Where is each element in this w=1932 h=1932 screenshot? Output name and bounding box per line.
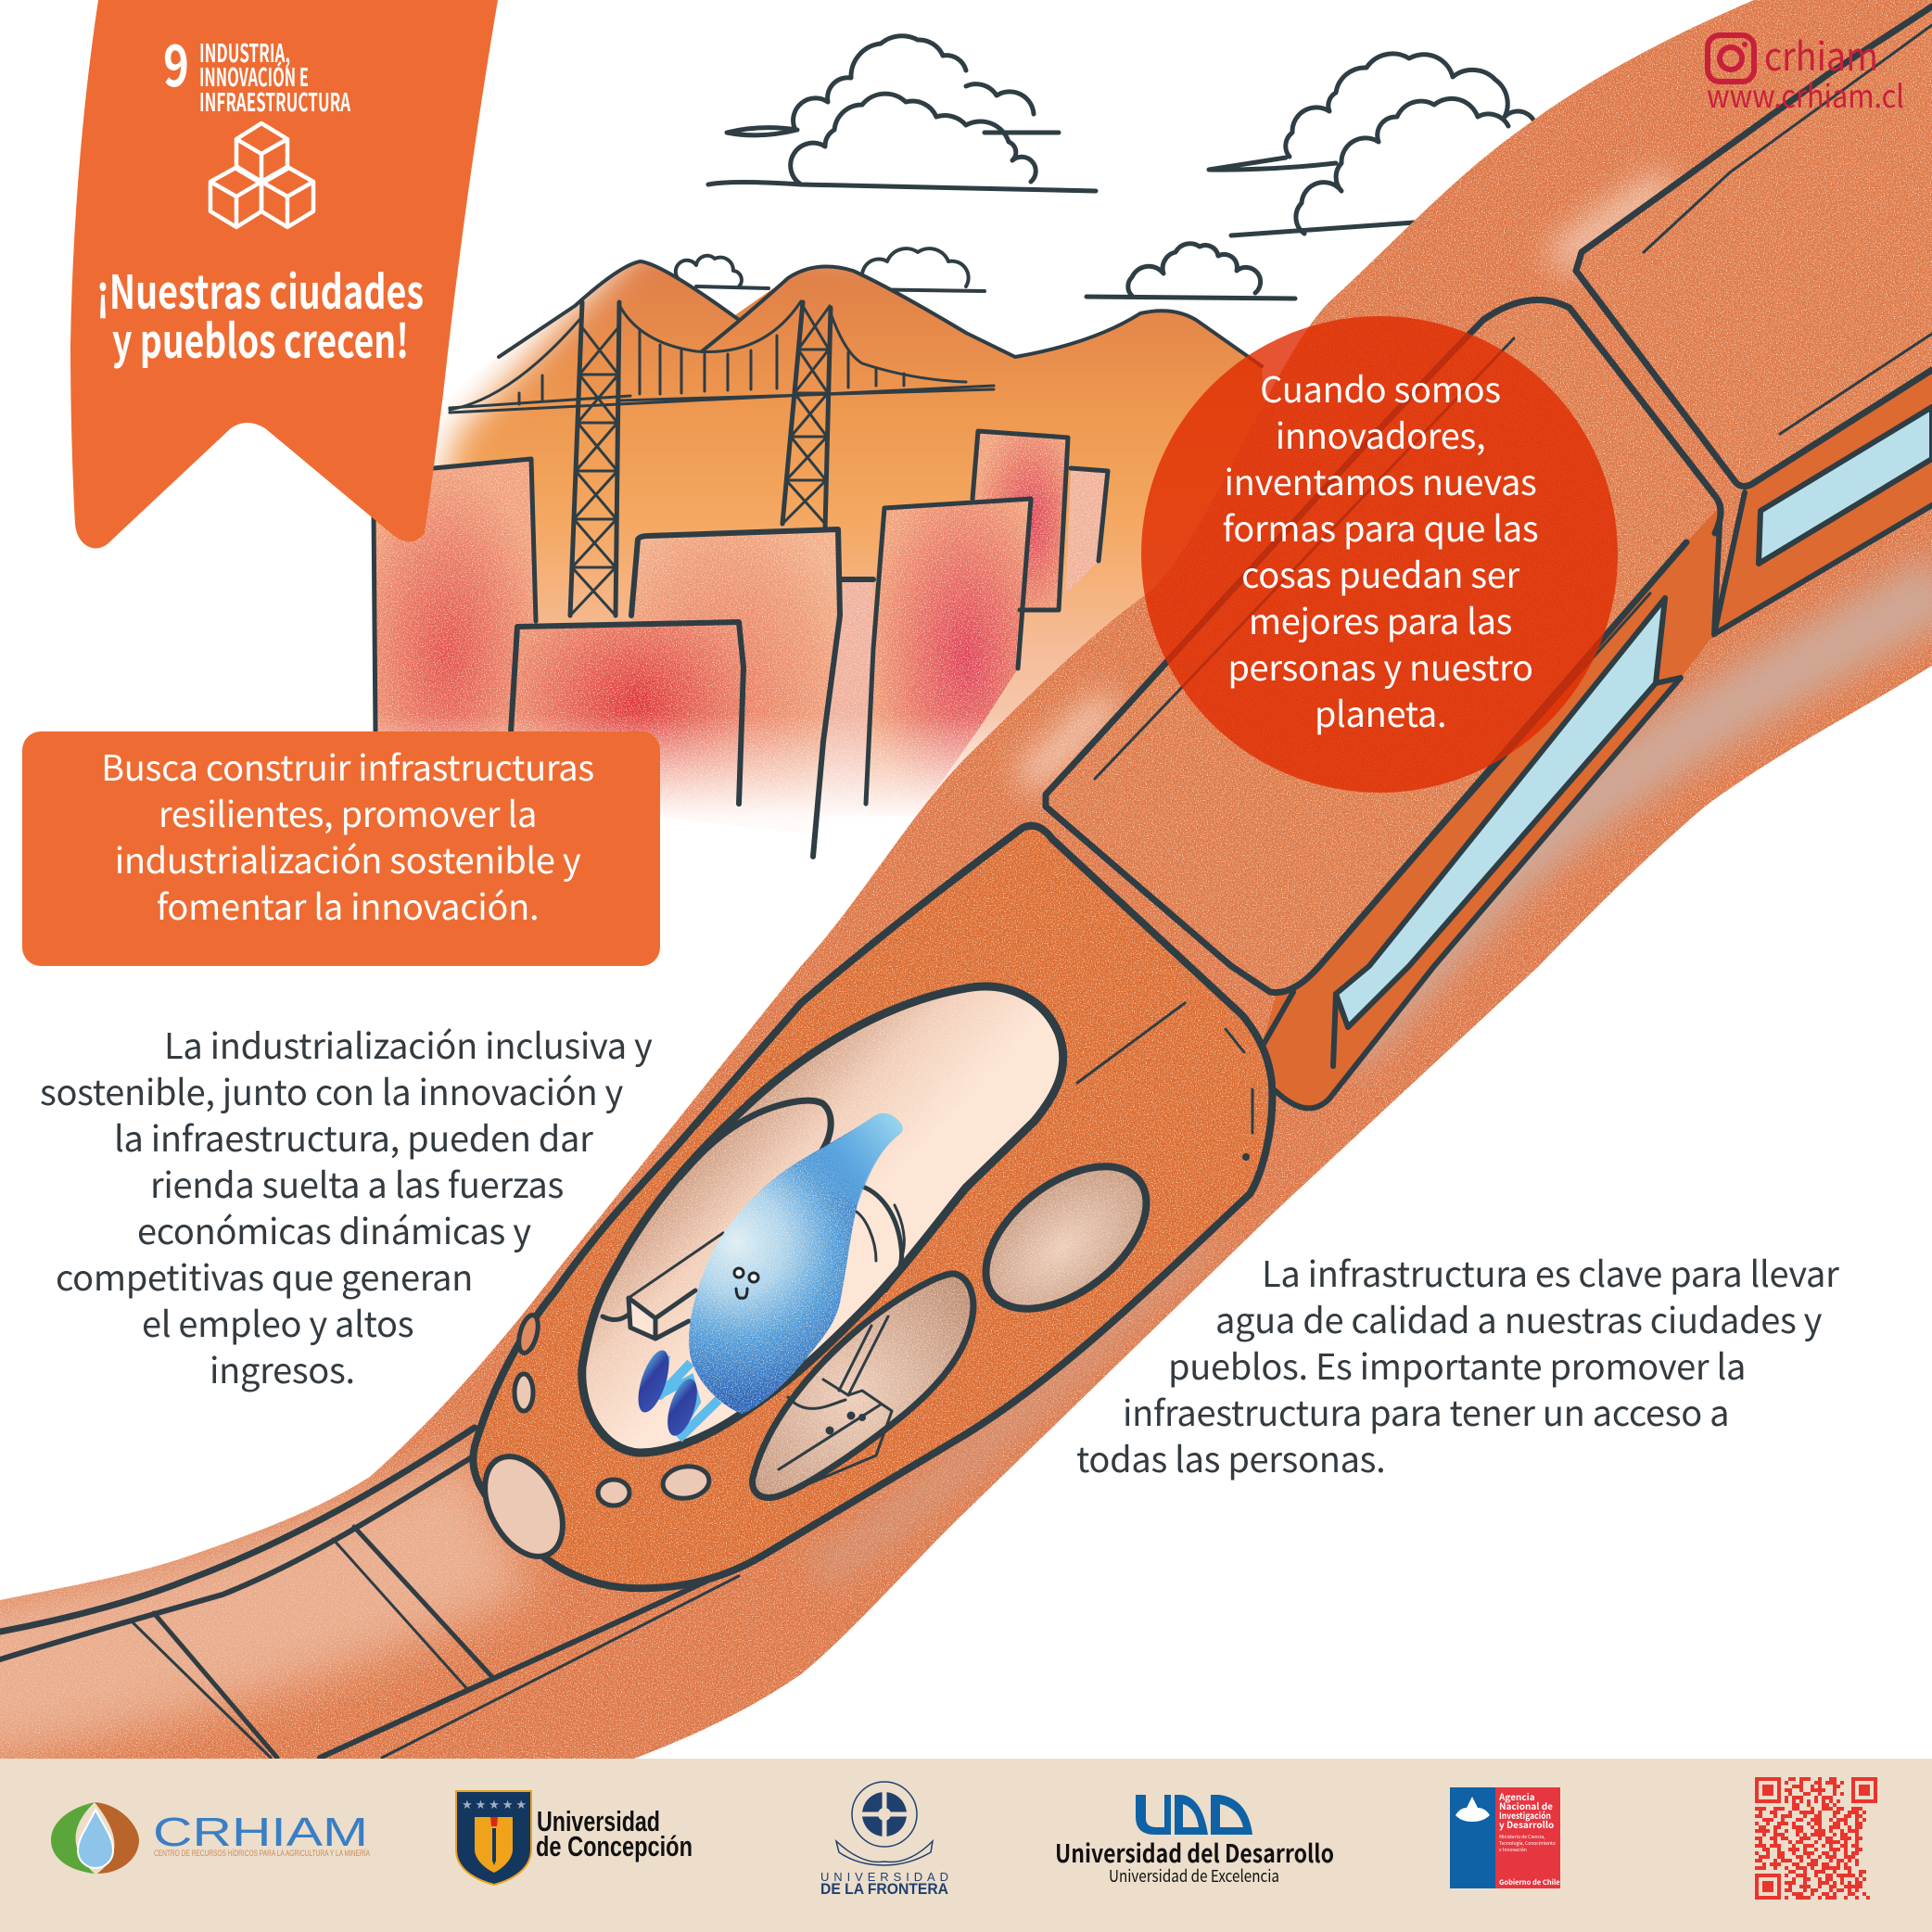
icon: instagram [1708,35,1754,82]
city: mountains and buildings [352,232,1298,857]
banner: SDG 9 [70,0,498,548]
right paragraph: pueblos. Es importante promover la [1168,1339,1746,1390]
side oval window [960,1138,1173,1337]
logo: ANID: Agencia [1498,1789,1535,1803]
logo: Universidad de Concepción: de Concepción [536,1830,693,1862]
building fills [375,431,1108,834]
icon: cubes [210,123,313,227]
nose headlight [469,1443,578,1570]
banner: SDG 9: INFRAESTRUCTURA [199,83,350,119]
logo: CRHIAM: CENTRO DE RECURSOS HÍDRICOS PARA LA AGRICULTURA Y LA MINERÍA [154,1849,370,1858]
handle text: crhiam [1764,26,1878,83]
right paragraph: todas las personas. [1076,1431,1385,1482]
drop tail highlight [788,1113,903,1205]
goal title: INDUSTRIA, [199,33,290,70]
box text: Busca construir infrastructuras [101,740,594,791]
left paragraph: ingresos. [210,1342,355,1393]
callout text: formas para que las [1223,501,1538,552]
callout text: innovadores, [1276,408,1485,459]
callout text: Cuando somos [1260,362,1501,413]
logo: Universidad de La Frontera [820,1782,948,1898]
logo: CRHIAM [51,1802,370,1874]
bottom fade of the city [352,714,1075,848]
rear car window [1759,407,1932,564]
left paragraph: el empleo y altos [142,1296,413,1347]
face [734,1268,758,1298]
goal number: 9 [163,19,189,103]
rear car [1576,6,1932,640]
logo: ANID: e Innovación [1499,1847,1527,1853]
seat inside lower window [779,1316,892,1493]
logo: Universidad de Concepción [456,1791,693,1885]
cloud: over mountain one [676,256,769,288]
lead car [469,826,1272,1588]
left paragraph: rienda suelta a las fuerzas [150,1157,564,1208]
callout text: planeta. [1315,686,1446,737]
left paragraph: la infraestructura, pueden dar [114,1111,593,1162]
band pale shading [0,190,1932,1687]
logo: ANID: y Desarrollo [1499,1817,1554,1831]
orange text box [22,731,660,966]
left paragraph: La industrialización inclusiva y [164,1018,653,1069]
logo: CRHIAM: CRHIAM [153,1810,368,1855]
logo: ANID: Investigación [1499,1808,1551,1822]
bridge [450,301,994,413]
right paragraph: agua de calidad a nuestras ciudades y [1215,1292,1823,1343]
mountain outlines [499,261,1262,366]
cloud: center top [708,36,1096,191]
cloud: over mountain two [853,248,985,291]
lower window [753,1274,973,1497]
inner seat outline [680,1100,831,1177]
logo: Universidad del Desarrollo [1055,1795,1334,1888]
logo: Universidad del Desarrollo: Universidad del Desarrollo [1055,1834,1334,1870]
legs [660,1355,718,1439]
tower two [782,302,831,529]
logo: ANID: Gobierno de Chile [1499,1877,1560,1888]
box text: industrialización sostenible y [115,833,581,883]
water drop character [632,1113,903,1439]
cloud: right [1209,54,1536,235]
logo: Universidad de Concepción: Universidad [537,1805,660,1837]
website: www.crhiam.cl [1707,71,1904,117]
shoes [632,1347,675,1416]
tower one [570,302,619,616]
callout text: cosas puedan ser [1241,547,1519,598]
right paragraph: La infrastructura es clave para llevar [1262,1246,1839,1297]
banner: SDG 9: INNOVACIÓN E [199,57,309,94]
logo: ANID: Nacional de [1499,1799,1553,1812]
QR code [1755,1779,1875,1898]
rails and sleepers [0,1428,770,1758]
logo: ANID: Tecnología, Conocimiento [1499,1840,1556,1847]
armrest beam [629,1233,723,1339]
train [469,6,1932,1588]
left paragraph: sostenible, junto con la innovación y [40,1064,624,1115]
banner headline: ¡Nuestras ciudades [96,256,424,323]
middle car window [1336,598,1665,1027]
logo: Universidad del Desarrollo: Universidad de Excelencia [1109,1863,1279,1888]
hazy orange backdrop [434,263,1265,794]
box text: resilientes, promover la [159,786,537,837]
middle car [1046,300,1721,1109]
seat back arcs [858,1185,902,1290]
instagram handle [1707,26,1904,117]
nose small lights [515,1313,711,1506]
left paragraph: competitivas que generan [56,1250,473,1301]
lead car body [473,826,1272,1588]
banner: SDG 9: y pueblos crecen! [112,305,409,372]
footer [0,1759,1932,1932]
building outlines [374,431,1108,857]
body outline [473,826,1272,1588]
logo: Universidad de La Frontera: UNIVERSIDAD [820,1870,948,1884]
callout text: inventamos nuevas [1224,454,1537,505]
red circle callout [1141,316,1618,793]
left paragraph: económicas dinámicas y [137,1203,531,1254]
callout text: personas y nuestro [1227,640,1533,691]
windshield outline [582,986,1063,1453]
right paragraph: infraestructura para tener un acceso a [1123,1385,1729,1436]
logo: Universidad de Concepción: ★★★★★ [462,1799,527,1812]
clouds [676,36,1536,299]
cloud: center small [1087,244,1295,299]
logo: ANID: Ministerio de Ciencia, [1499,1834,1545,1840]
callout text: mejores para las [1249,593,1512,644]
drop body [689,1113,903,1414]
windshield [582,986,1063,1453]
box text: fomentar la innovación. [157,879,539,930]
logo: ANID [1450,1787,1560,1888]
logo: Universidad de La Frontera: DE LA FRONTERA [820,1880,948,1898]
